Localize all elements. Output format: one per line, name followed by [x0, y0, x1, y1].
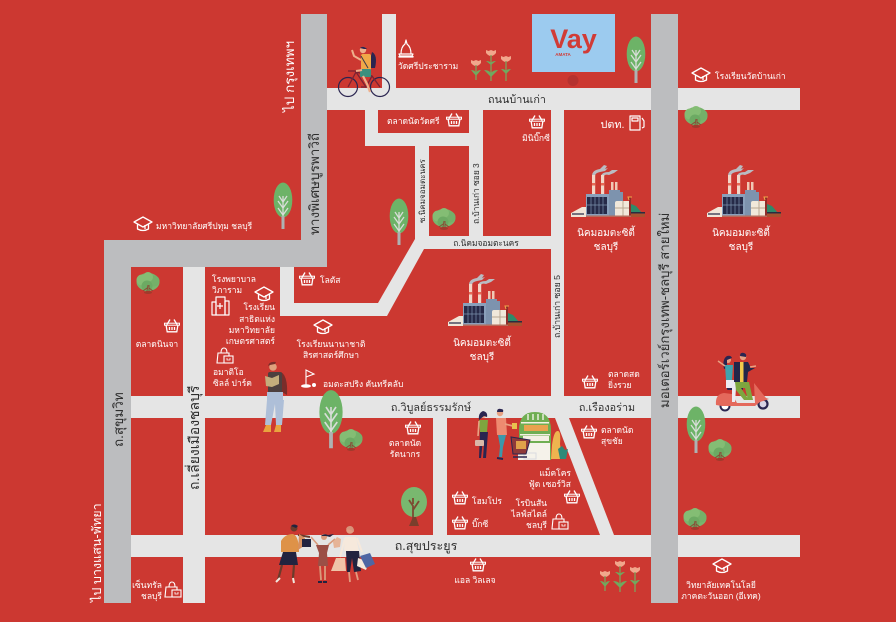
label: Central Chonburi: ชลบุรี	[141, 591, 162, 602]
label: HomePro: โฮมโปร	[472, 496, 502, 506]
icon: basket	[446, 114, 462, 126]
label: Sirasart international school: สิรศาสตร์ศึกษา	[303, 350, 359, 360]
label: Amata City Chonburi: ชลบุรี	[594, 241, 619, 253]
label: Central Chonburi: เซ็นทรัล	[132, 579, 162, 590]
road name: to Bangkok: ไป กรุงเทพฯ	[282, 41, 298, 113]
tree	[390, 198, 408, 245]
label: Makro Food Service: แม็คโคร	[539, 467, 571, 478]
Vay Amata logo panel: Vay	[550, 24, 597, 54]
icon: basket	[406, 422, 420, 434]
icon: shopping bag	[552, 514, 568, 529]
bush	[136, 272, 160, 294]
label: Kasetsart demonstration school: โรงเรียน	[243, 302, 275, 312]
road name: Soi Nikhom Chomtanakorn: ซ.นิคมจอมตะนคร	[418, 158, 427, 223]
icon: hospital	[212, 297, 229, 315]
icon: basket	[530, 116, 544, 128]
label: Amata City Chonburi: นิคมอมตะซิตี้	[577, 225, 636, 239]
road name: Burapha Withi Expressway: ทางพิเศษบูรพาวิถี	[307, 133, 323, 235]
road name: Wiboon: ถ.วิบูลย์ธรรมรักษ์	[391, 401, 471, 414]
highways	[104, 14, 678, 603]
icon: school cap	[134, 217, 152, 230]
Vay Amata logo panel: AMATA	[555, 52, 572, 57]
tree	[687, 406, 705, 453]
bush	[340, 429, 362, 451]
illustration: cyclist	[338, 47, 390, 96]
label: Amatio Sill Park: อมาติโอ	[213, 367, 244, 377]
label: Robinson Lifestyle: ไลฟ์สไตล์	[510, 509, 547, 519]
bush	[684, 508, 706, 530]
label: Robinson Lifestyle: ชลบุรี	[526, 520, 547, 531]
label: Amata City Chonburi: นิคมอมตะซิตี้	[453, 335, 512, 349]
flowers	[471, 50, 511, 81]
label: Mini Big C: มินิบิ๊กซี	[522, 131, 550, 143]
icon: school cap	[713, 559, 731, 572]
label: E-Tech college: ภาคตะวันออก (อีเทค)	[681, 591, 761, 601]
label: Ying Ruay market: ตลาดสด	[608, 369, 640, 379]
label: Amata City Chonburi: ชลบุรี	[470, 351, 495, 363]
label: Wat Si Prachharam: วัดศรีประชาราม	[398, 61, 458, 71]
label: E-Tech college: วิทยาลัยเทคโนโลยี	[686, 580, 756, 590]
road name: Sukhumvit: ถ.สุขุมวิท	[111, 392, 127, 447]
bush	[432, 208, 456, 230]
icon: gas station	[630, 116, 644, 130]
label: Kasetsart demonstration school: สาธิตแห่ง	[239, 314, 275, 324]
label: Amata City Chonburi: นิคมอมตะซิตี้	[712, 225, 771, 239]
label: Amatio Sill Park: ซิลล์ ปาร์ค	[213, 378, 252, 388]
icon: basket	[564, 490, 580, 503]
brown tree	[401, 487, 427, 526]
icon: basket	[582, 426, 596, 438]
icon: shopping bag	[217, 348, 233, 363]
icon: factory	[571, 165, 645, 217]
label: Hospital: วิภาราม	[212, 285, 242, 295]
icon: factory	[707, 165, 781, 217]
road name: Nikhom Chomtanakorn: ถ.นิคมจอมตะนคร	[453, 238, 519, 248]
illustration: couple on scooter	[716, 353, 769, 410]
label: Hospital: โรงพยาบาล	[212, 274, 256, 284]
icon: basket	[164, 320, 180, 332]
label: Rattanakorn market: ตลาดนัด	[389, 438, 421, 448]
label: PTT: ปตท.	[601, 119, 624, 131]
tree	[274, 182, 292, 229]
icon: factory	[448, 274, 522, 326]
road name: Chonburi bypass: ถ.เลี่ยงเมืองชลบุรี	[185, 385, 203, 490]
label: Sukchai market: สุขชัย	[601, 436, 623, 447]
flowers	[600, 561, 640, 592]
road name: Ban Kao Soi 5: ถ.บ้านเก่า ซอย 5	[552, 275, 562, 338]
icon: basket	[582, 376, 598, 388]
illustration: man reading	[263, 362, 287, 432]
label: Ying Ruay market: ยิ่งรวย	[608, 379, 631, 390]
label: Wat Si market: ตลาดนัดวัดศรี	[387, 116, 440, 126]
illustration: family with shopping bags	[276, 524, 375, 583]
tree	[627, 36, 645, 83]
icon: golf flag	[301, 370, 316, 388]
label: Ninja market: ตลาดนินจา	[136, 339, 178, 349]
road name: Sukprayoon: ถ.สุขประยูร	[395, 539, 458, 554]
icon: school cap	[314, 320, 332, 334]
label: Sirasart international school: โรงเรียนนานาชาติ	[297, 339, 365, 349]
label: Wat Ban Kao School: โรงเรียนวัดบ้านเก่า	[715, 71, 786, 81]
road name: Ban Kao Soi 3: ถ.บ้านเก่า ซอย 3	[471, 163, 481, 224]
label: Amata Spring Country Club: อมตะสปริง คันทรีคลับ	[323, 379, 403, 389]
label: Makro Food Service: ฟู้ด เซอร์วิส	[529, 479, 572, 490]
local roads	[131, 14, 800, 603]
icon: basket	[452, 516, 468, 529]
bush	[684, 106, 708, 128]
label: L Village: แอล วิลเลจ	[454, 575, 496, 585]
road name: motorway: มอเตอร์เวย์กรุงเทพ-ชลบุรี สายใหม่	[657, 213, 673, 408]
illustration: couple shopping at supermarket	[475, 409, 568, 460]
location pin dot	[568, 75, 578, 86]
label: Lotus: โลตัส	[320, 275, 341, 285]
icon: basket	[452, 492, 468, 504]
label: Sripatum University: มหาวิทยาลัยศรีปทุม ชลบุรี	[156, 221, 253, 232]
bush	[708, 439, 732, 461]
icon: basket	[300, 272, 314, 285]
road name: to Bang Saen Pattaya: ไป บางแสน-พัทยา	[90, 503, 104, 603]
icon: school cap	[692, 68, 710, 82]
label: Kasetsart demonstration school: เกษตรศาสตร์	[226, 336, 275, 346]
tree	[319, 390, 343, 448]
Vay Amata logo panel	[532, 14, 615, 72]
icon: basket	[470, 558, 486, 571]
icon: shopping bag	[165, 582, 181, 597]
label: Amata City Chonburi: ชลบุรี	[729, 241, 754, 253]
label: Rattanakorn market: รัตนากร	[390, 449, 421, 459]
icon: temple	[399, 40, 413, 57]
road name: Rueang Aram: ถ.เรืองอร่าม	[579, 401, 635, 414]
label: Big C: บิ๊กซี	[472, 517, 489, 529]
label: Sukchai market: ตลาดนัด	[601, 425, 633, 435]
label: Robinson Lifestyle: โรบินสัน	[516, 498, 547, 508]
icon: school cap	[255, 287, 273, 300]
label: Kasetsart demonstration school: มหาวิทยาลัย	[229, 325, 275, 335]
road name: Ban Kao: ถนนบ้านเก่า	[488, 94, 546, 106]
